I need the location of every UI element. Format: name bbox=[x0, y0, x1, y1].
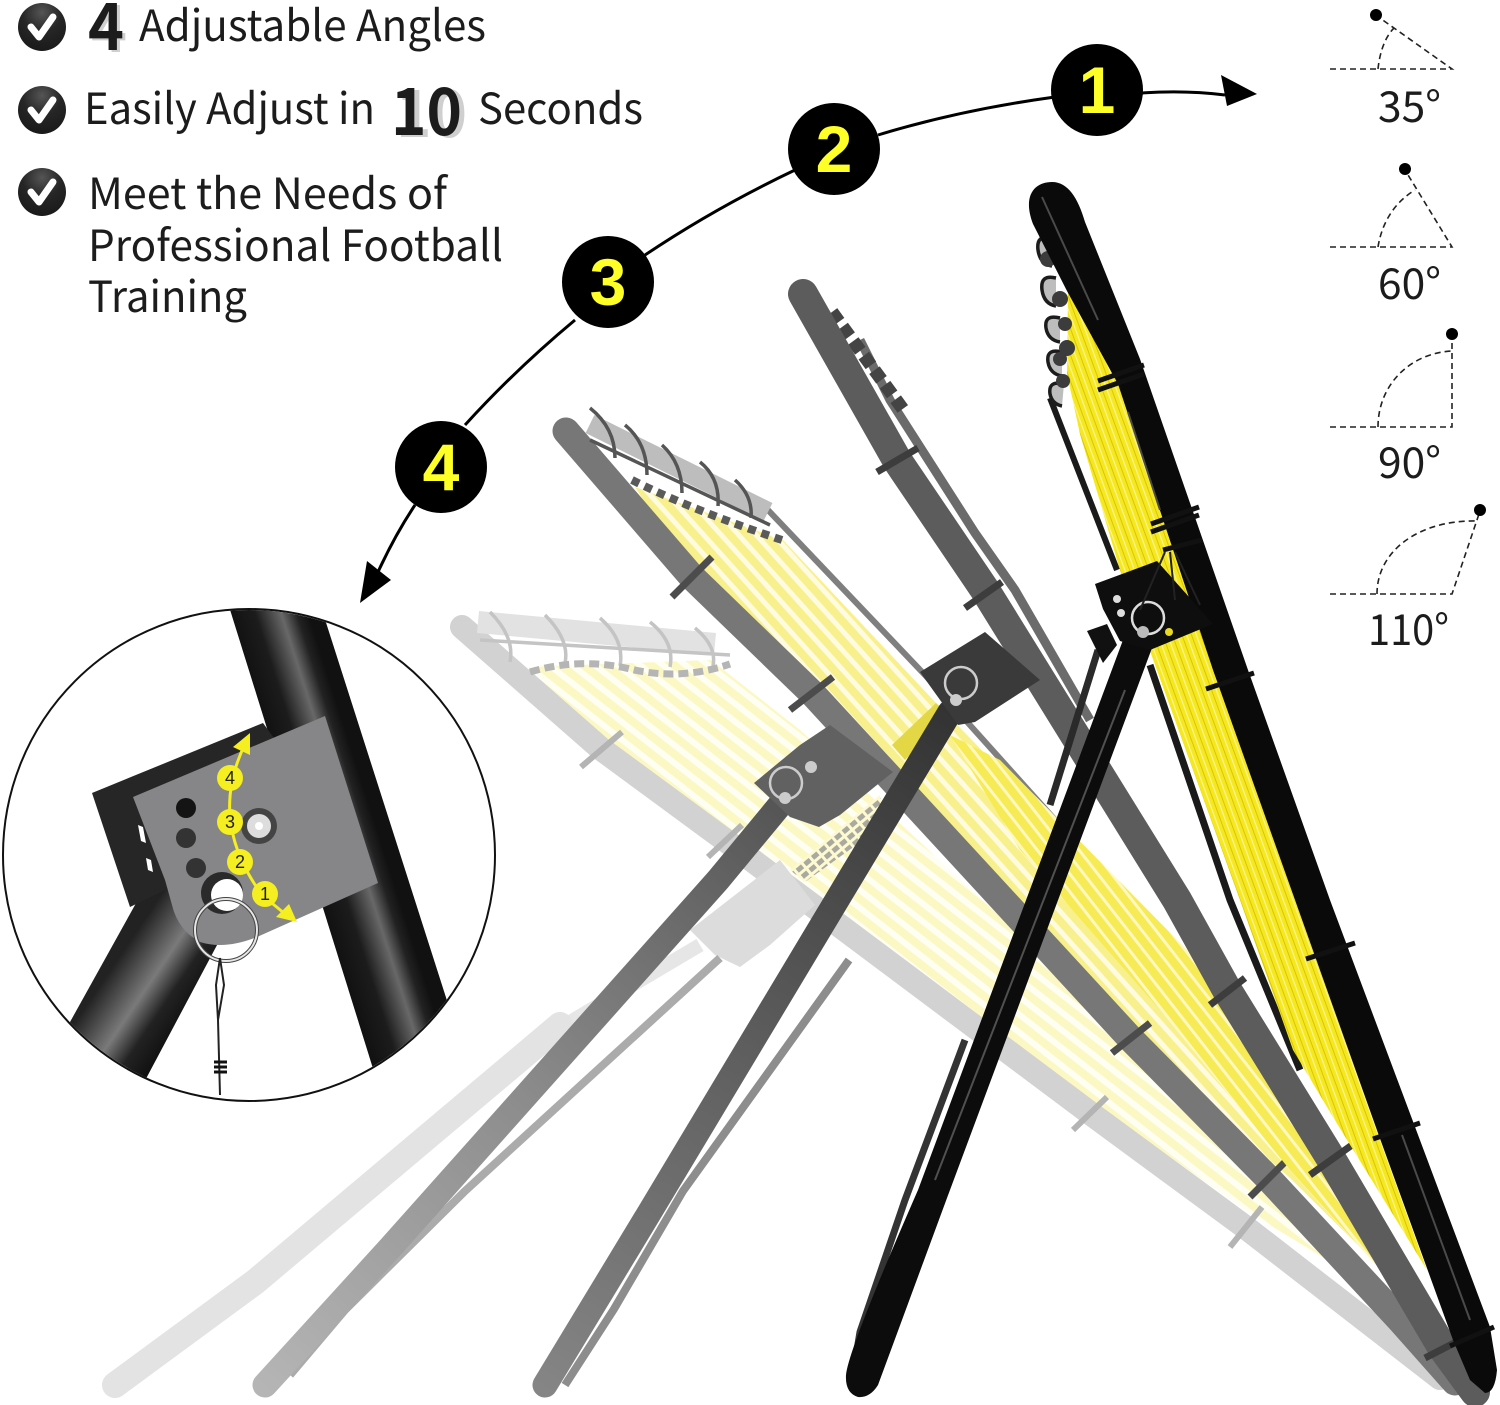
check icon 3 bbox=[18, 168, 66, 216]
step badges bbox=[217, 765, 278, 907]
badge 1: 1 bbox=[1079, 53, 1115, 127]
rebounder position 3: light grey frame bbox=[265, 408, 1455, 1385]
badge 2 bbox=[788, 103, 880, 195]
badge 3: 3 bbox=[590, 245, 626, 319]
step badges: 4 bbox=[225, 768, 235, 788]
feature list bbox=[18, 0, 643, 325]
step badges: 3 bbox=[225, 812, 235, 832]
badge 2: 2 bbox=[816, 112, 852, 186]
bolt bbox=[241, 808, 277, 844]
angle 90 degrees: 90° bbox=[1378, 429, 1441, 491]
check icon 1 bbox=[18, 3, 66, 51]
angle 110 degrees bbox=[1330, 504, 1486, 658]
feature: adjust in 10 seconds: Seconds bbox=[478, 75, 643, 137]
rebounder position 1: black upright frame with yellow net bbox=[846, 182, 1497, 1397]
badge 4: 4 bbox=[423, 430, 460, 504]
pin and ring bbox=[195, 872, 257, 1095]
rear plate holes bbox=[138, 825, 153, 872]
feature: professional training bbox=[88, 160, 503, 325]
feature: professional training: Training bbox=[88, 263, 247, 325]
angle 35 degrees: 35° bbox=[1378, 73, 1441, 135]
rear plate bbox=[92, 723, 290, 907]
angle diagrams bbox=[1330, 9, 1486, 658]
adjustment holes bbox=[176, 798, 206, 878]
feature: adjust in 10 seconds bbox=[84, 60, 643, 156]
rebounder position 2: dark grey frame bbox=[545, 294, 1475, 1392]
step badges: 1 bbox=[260, 884, 270, 904]
check icon 2 bbox=[18, 86, 66, 134]
bracket plate bbox=[133, 716, 378, 945]
rebounder position 4: faintest frame bbox=[115, 612, 1440, 1385]
angle 90 degrees bbox=[1330, 328, 1458, 491]
badge 4 bbox=[395, 421, 487, 513]
arrowhead: top right bbox=[1221, 75, 1257, 106]
feature: adjust in 10 seconds: Easily Adjust in bbox=[84, 75, 375, 137]
angle 35 degrees bbox=[1330, 9, 1452, 135]
yellow adjustment path bbox=[228, 750, 283, 912]
feature: professional training: Professional Football bbox=[88, 212, 503, 274]
step badges: 2 bbox=[235, 852, 245, 872]
feature: 4 adjustable angles bbox=[88, 0, 486, 71]
inset detail circle bbox=[3, 600, 495, 1101]
arc arrow with numbered positions bbox=[360, 44, 1257, 603]
badge 1 bbox=[1051, 44, 1143, 136]
upright tube bbox=[227, 600, 450, 1075]
feature: adjust in 10 seconds: 10 bbox=[391, 60, 462, 154]
arrowhead: bottom left bbox=[360, 561, 391, 603]
feature: professional training: Meet the Needs of bbox=[88, 160, 449, 222]
feature: adjust in 10 seconds: 10 bbox=[396, 62, 467, 156]
angle 60 degrees: 60° bbox=[1378, 250, 1441, 312]
badge 3 bbox=[562, 236, 654, 328]
angled leg bbox=[70, 888, 218, 1078]
angle 60 degrees bbox=[1330, 163, 1452, 312]
angle 110 degrees: 110° bbox=[1368, 596, 1449, 658]
